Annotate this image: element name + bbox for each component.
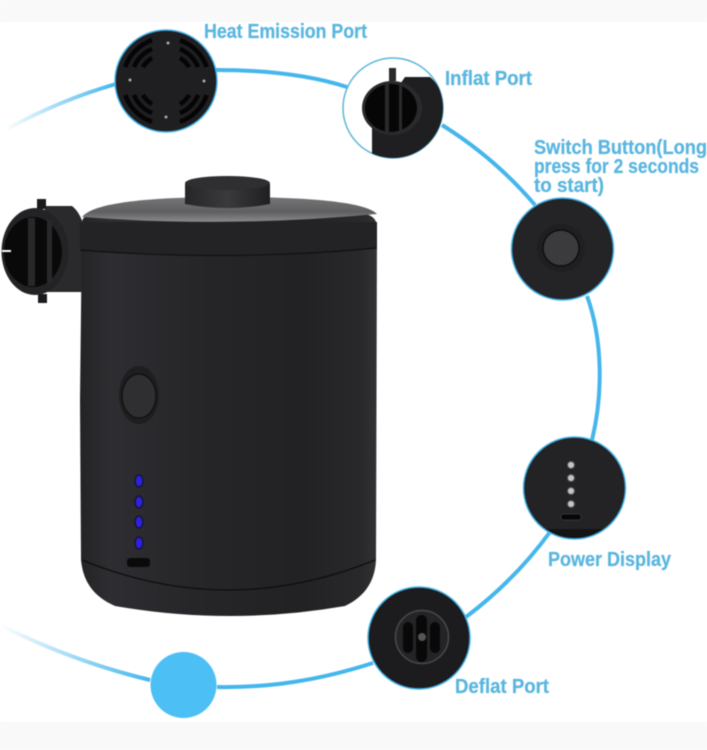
label: heat emission port: Heat Emission Port [204,21,367,43]
pump product [2,176,377,616]
body [80,214,377,616]
label: switch button [534,137,707,197]
callout: power display [520,437,630,541]
blue dot [150,652,216,718]
battery LEDs [135,475,143,549]
callout: switch button [512,198,614,300]
label: inflate port: Inflat Port [445,68,532,90]
callout: inflate port [343,58,445,160]
footer band [0,722,707,750]
callout: deflate port [368,587,470,689]
label: power display: Power Display [548,549,672,571]
label: deflate port: Deflat Port [455,676,549,698]
callout: heat emission port [115,30,217,132]
connecting arc [0,70,600,687]
nozzle [2,199,86,303]
label: switch button: to start) [534,175,604,197]
top knob [185,176,270,208]
power button [119,366,159,424]
base seam [82,560,375,590]
lid [82,197,377,222]
upper band [80,222,377,256]
header band [0,0,707,22]
USB port [127,558,150,567]
